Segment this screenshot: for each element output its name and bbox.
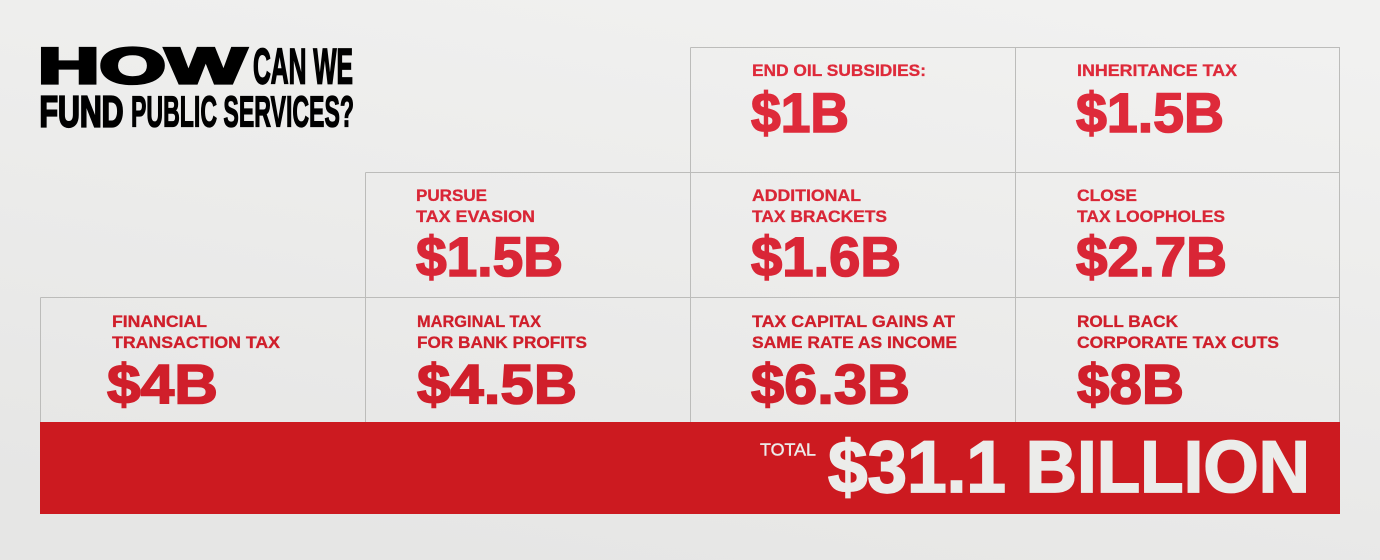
panel: close tax loopholes: CLOSE	[1077, 187, 1137, 205]
panel: end oil subsidies	[751, 62, 926, 144]
panel: financial transaction tax: $4B	[107, 352, 218, 416]
panel: close tax loopholes: TAX LOOPHOLES	[1077, 208, 1225, 226]
title: FUND	[40, 88, 124, 136]
text: CAN WE	[253, 38, 353, 94]
panel: financial transaction tax: FINANCIAL	[112, 313, 207, 331]
panel: inheritance tax: $1.5B	[1076, 81, 1224, 144]
panel: tax capital gains: $6.3B	[751, 352, 910, 416]
panel: roll back corporate tax cuts: CORPORATE TAX CUTS	[1077, 334, 1279, 352]
title: HOW	[38, 38, 247, 94]
total label: TOTAL	[760, 440, 816, 460]
panel: additional tax brackets: $1.6B	[751, 225, 901, 288]
panel: marginal tax for bank profits: FOR BANK PROFITS	[417, 334, 587, 352]
panel: additional tax brackets: ADDITIONAL	[752, 187, 861, 205]
panel: additional tax brackets: TAX BRACKETS	[752, 208, 887, 226]
title	[38, 38, 354, 136]
grid of table lines	[40, 48, 1340, 422]
panel: tax capital gains: TAX CAPITAL GAINS AT	[752, 313, 955, 331]
panel: marginal tax for bank profits: MARGINAL TAX	[417, 313, 541, 331]
panel: close tax loopholes	[1076, 187, 1227, 288]
panel: end oil subsidies: $1B	[751, 81, 849, 144]
panel: additional tax brackets	[751, 187, 901, 288]
panel: pursue tax evasion: TAX EVASION	[416, 208, 535, 226]
panel: marginal tax for bank profits	[417, 313, 587, 416]
panel: roll back corporate tax cuts: ROLL BACK	[1077, 313, 1178, 331]
panel: marginal tax for bank profits: $4.5B	[417, 352, 577, 416]
panel: financial transaction tax	[107, 313, 280, 416]
panel: pursue tax evasion: PURSUE	[416, 187, 487, 205]
panel: end oil subsidies: END OIL SUBSIDIES:	[752, 62, 926, 80]
total bar	[40, 422, 1340, 514]
panel: roll back corporate tax cuts: $8B	[1077, 352, 1184, 416]
panel: roll back corporate tax cuts	[1077, 313, 1279, 416]
title: PUBLIC SERVICES?	[131, 88, 354, 136]
panel: pursue tax evasion	[416, 187, 563, 288]
panel: tax capital gains: SAME RATE AS INCOME	[752, 334, 957, 352]
total value: $31.1 BILLION	[828, 427, 1310, 508]
panel: close tax loopholes: $2.7B	[1076, 225, 1227, 288]
panel: inheritance tax: INHERITANCE TAX	[1077, 62, 1237, 80]
panel: pursue tax evasion: $1.5B	[416, 225, 563, 288]
panel: financial transaction tax: TRANSACTION TAX	[112, 334, 280, 352]
panel: tax capital gains	[751, 313, 957, 416]
